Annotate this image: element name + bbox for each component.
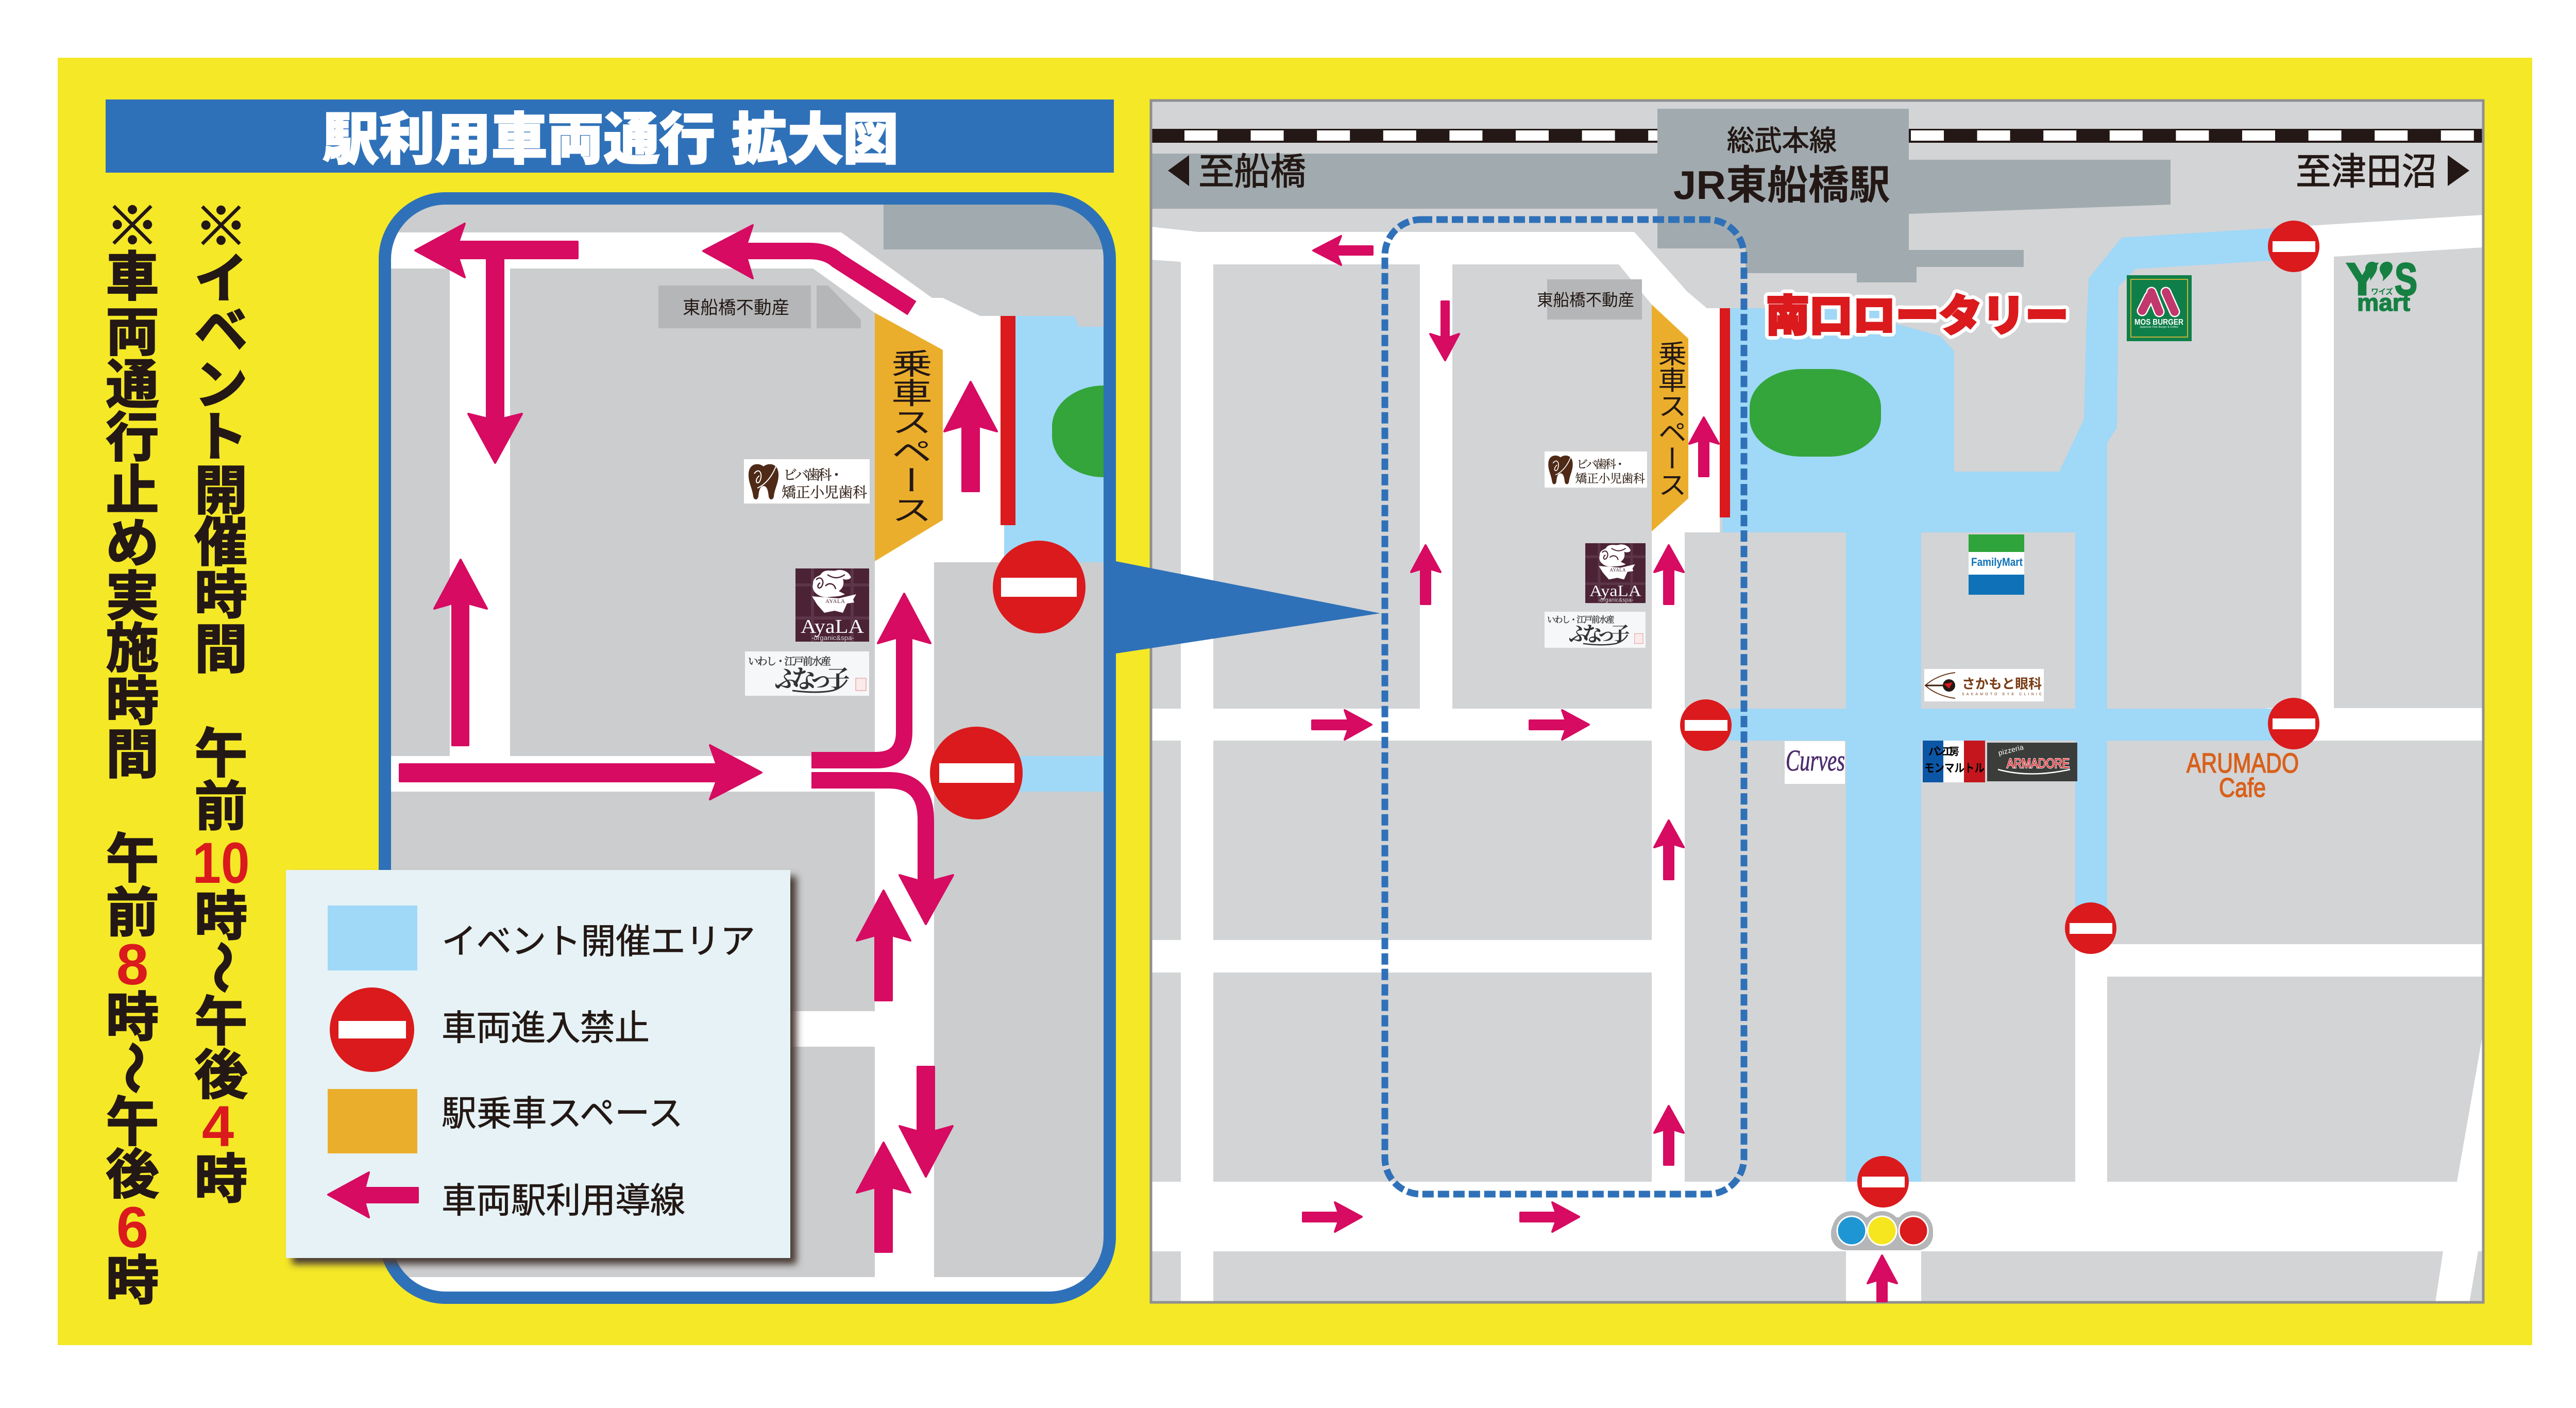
notice: vehicle stop hours (vertical text): 時 <box>106 988 159 1047</box>
logo: Ayala (map): AYALA <box>1609 567 1626 573</box>
legend: no entry <box>330 987 650 1072</box>
logo: Y's mart: mart <box>2357 289 2410 316</box>
label: 南口ロータリー: 南口ロータリー <box>1766 292 2069 340</box>
legend: route arrow <box>328 1172 685 1220</box>
label: 東船橋不動産 <box>658 286 861 328</box>
panel border <box>385 198 1110 1298</box>
roads <box>1151 227 2483 1302</box>
logo: Arumado Cafe <box>2187 748 2299 803</box>
event area (blue) <box>1722 227 2294 1182</box>
legend: boarding space <box>328 1089 683 1153</box>
boarding space (orange) <box>875 313 943 561</box>
logo: Viva dental (map): 矯正小児歯科 <box>1575 472 1645 485</box>
legend: boarding space: 駅乗車スペース <box>442 1094 683 1133</box>
notice: vehicle stop hours (vertical text): 午後 <box>106 1093 159 1204</box>
panel: street map <box>1151 100 2483 1302</box>
logo: Y's mart <box>2346 254 2417 316</box>
no-entry sign: top right <box>2268 221 2319 272</box>
boarding space (map) <box>1652 305 1688 531</box>
notice: vehicle stop hours (vertical text): 時 <box>106 1251 159 1311</box>
logo: Armadore pizzeria <box>1987 743 2077 781</box>
logo: Ayala (map): -organic&spa- <box>1598 597 1634 604</box>
logo: Funakko: ふなっ子 <box>774 666 850 693</box>
logo: Sakamoto eye clinic <box>1924 669 2044 701</box>
logo: Viva dental (map) <box>1545 451 1647 488</box>
logo: Ayala: AYALA <box>825 598 845 605</box>
notice: vehicle stop hours (vertical text) <box>103 197 162 1311</box>
logo: Pan Kobo Montmartre <box>1923 741 1985 782</box>
logo: Armadore pizzeria: ARMADORE <box>2007 756 2070 771</box>
logo: FamilyMart <box>1969 534 2024 595</box>
title banner: 駅利用車両通行拡大図 <box>323 108 899 171</box>
label: 南口ロータリー: 南口ロータリー <box>1766 292 2069 340</box>
no-entry sign: lower street <box>2065 902 2116 954</box>
map frame <box>1151 100 2483 1302</box>
logo: Y's mart: Y <box>2346 254 2378 305</box>
logo: MOS Burger: Japanese Fine Burger & Coffee <box>2140 326 2178 329</box>
traffic signal <box>1831 1211 1933 1250</box>
notice: event hours (vertical text): 10 <box>193 831 249 895</box>
logo: Pan Kobo Montmartre: モンマルトル <box>1924 762 1985 775</box>
notice: event hours (vertical text): ～ <box>192 941 251 994</box>
label: 東船橋不動産: 東船橋不動産 <box>683 298 789 318</box>
dashed enlarge-area outline <box>1385 220 1744 1194</box>
notice: vehicle stop hours (vertical text): 8 <box>116 932 148 997</box>
logo: Viva dental: ビバ歯科・ <box>783 467 843 483</box>
red curb bar (map) <box>1720 308 1730 517</box>
logo: Arumado Cafe: Cafe <box>2219 773 2266 803</box>
no-entry sign: side street <box>930 727 1023 819</box>
legend: event area: イベント開催エリア <box>442 922 755 961</box>
logo: MOS Burger: MOS BURGER <box>2134 318 2183 327</box>
no-entry sign: rotary <box>993 541 1086 633</box>
label: 東船橋不動産 (map) <box>1537 279 1642 320</box>
boarding space (map): 乗車スペース <box>1654 340 1686 498</box>
no-entry sign: main street <box>1857 1156 1909 1208</box>
notice: vehicle stop hours (vertical text): 午前 <box>106 829 159 943</box>
label: 東船橋不動産 (map): 東船橋不動産 <box>1537 291 1634 309</box>
no-entry sign: east street <box>2268 698 2319 749</box>
notice: event hours (vertical text) <box>192 197 251 1209</box>
logo: Curves: Curves <box>1786 744 1845 777</box>
notice: event hours (vertical text): 午後 <box>195 992 247 1105</box>
no-entry sign: south rotary <box>1680 699 1732 751</box>
rotary green island <box>1750 369 1881 457</box>
legend <box>286 870 790 1258</box>
logo: Ayala: -organic&spa- <box>811 634 854 642</box>
logo: Viva dental: 矯正小児歯科 <box>782 484 867 501</box>
title banner <box>106 99 1114 173</box>
notice: vehicle stop hours (vertical text): ※車両通行止め実施時間 <box>106 197 159 784</box>
logo: Viva dental <box>744 459 870 504</box>
boarding space (orange): 乗車スペース <box>885 348 931 524</box>
arrows in enlarged map <box>400 224 997 1252</box>
notice: event hours (vertical text): 時 <box>195 887 247 946</box>
notice: vehicle stop hours (vertical text): 6 <box>116 1195 148 1260</box>
roads <box>385 232 1110 1298</box>
legend: route arrow: 車両駅利用導線 <box>442 1181 685 1220</box>
logo: MOS Burger <box>2127 275 2192 341</box>
logo: Funakko (map): ふなっ子 <box>1568 624 1630 646</box>
rotary green island <box>1052 385 1104 477</box>
logo: Curves <box>1785 741 1845 784</box>
station building <box>1151 109 2171 282</box>
logo: Funakko (map) <box>1545 612 1646 648</box>
logo: Armadore pizzeria: pizzeria <box>1997 743 2024 757</box>
logo: Sakamoto eye clinic: さかもと眼科 <box>1962 676 2042 692</box>
legend: no entry: 車両進入禁止 <box>442 1009 650 1048</box>
logo: Arumado Cafe: ARUMADO <box>2187 748 2299 779</box>
logo: Funakko: いわし・江戸前水産 <box>748 656 831 667</box>
label: JR東船橋駅: JR東船橋駅 <box>1673 162 1890 208</box>
station building <box>884 205 1103 249</box>
notice: event hours (vertical text): 4 <box>202 1094 234 1159</box>
notice: vehicle stop hours (vertical text): ～ <box>103 1041 162 1095</box>
logo: Funakko (map): いわし・江戸前水産 <box>1547 615 1615 625</box>
pointer triangle <box>1116 561 1380 653</box>
logo: Ayala (map) <box>1585 543 1646 604</box>
direction: 至船橋: 至船橋 <box>1198 152 1306 193</box>
notice: event hours (vertical text): ※イベント開催時間 <box>195 197 247 679</box>
notice: event hours (vertical text): 時 <box>195 1150 247 1209</box>
notice: event hours (vertical text): 午前 <box>195 724 247 836</box>
logo: Ayala (map): AyaLA <box>1589 581 1641 599</box>
label: 総武本線: 総武本線 <box>1727 125 1837 157</box>
logo: Ayala <box>795 568 869 642</box>
railway line <box>1151 129 2483 143</box>
logo: Y's mart: S <box>2395 254 2417 305</box>
legend: event area <box>328 906 755 970</box>
logo: Y's mart: ワイズ <box>2371 287 2393 296</box>
logo: Ayala: AyaLA <box>801 616 865 638</box>
logo: Viva dental (map): ビバ歯科・ <box>1577 458 1625 471</box>
red curb bar <box>1001 316 1015 525</box>
event area (blue) <box>1004 316 1110 792</box>
direction: 至津田沼: 至津田沼 <box>2296 152 2437 193</box>
logo: FamilyMart: FamilyMart <box>1971 556 2023 568</box>
logo: Pan Kobo Montmartre: パン工房 <box>1928 746 1959 758</box>
logo: Funakko <box>745 651 869 696</box>
logo: Sakamoto eye clinic: SAKAMOTO EYE CLINIC <box>1962 693 2042 696</box>
panel: enlarged map <box>385 198 1189 1298</box>
arrows on street map <box>1303 236 1897 1301</box>
